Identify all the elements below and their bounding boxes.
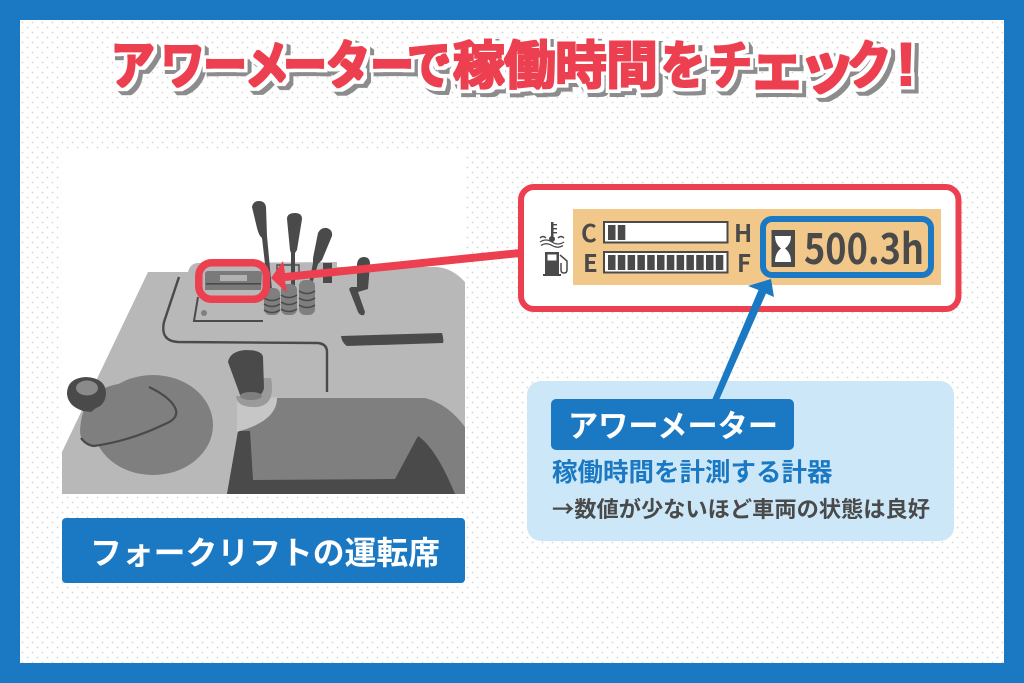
- collar and stick: [237, 397, 277, 432]
- blue arrow: [712, 279, 774, 400]
- note: →数値が少ないほど車両の状態は良好: [552, 492, 930, 524]
- gauge letters: C: [581, 214, 597, 249]
- red highlight box on console: [199, 263, 266, 299]
- title: をチ: [661, 24, 752, 99]
- caption: forklift driver's seat: フォークリフトの運転席: [90, 528, 440, 574]
- title: !: [896, 31, 916, 98]
- title: 稼働時間: [453, 24, 658, 99]
- bellows: [264, 280, 315, 315]
- title: ク: [847, 24, 891, 99]
- icon: coolant temperature: [540, 222, 564, 247]
- title: [110, 20, 916, 105]
- title: ッ: [798, 21, 856, 105]
- console lines: [163, 277, 327, 392]
- gauge panel: [573, 209, 941, 285]
- levers: [252, 201, 370, 315]
- caption: forklift driver's seat: [62, 518, 465, 583]
- icon: fuel pump: [543, 252, 567, 276]
- gauge letters: [581, 214, 752, 279]
- knob: [67, 377, 106, 412]
- gauge letters: F: [737, 244, 751, 279]
- lower panel: [227, 398, 465, 494]
- hour meter on console: [205, 271, 262, 290]
- gauge letters: E: [583, 244, 598, 279]
- red arrow: [271, 249, 520, 293]
- icon: hourglass: [772, 230, 795, 267]
- description: 稼働時間を計測する計器: [552, 452, 833, 489]
- title: アワーメーターで: [111, 24, 451, 99]
- temperature bar: [604, 222, 728, 242]
- title: ェ: [748, 20, 806, 104]
- label: hour meter: アワーメーター: [568, 401, 778, 446]
- hour reading: 500.3h: [804, 216, 924, 277]
- fuel bar: [604, 252, 728, 272]
- console base: [62, 262, 465, 494]
- explanation panel: [527, 381, 954, 541]
- steering wheel cover: [93, 375, 213, 475]
- blue hour meter box: [763, 219, 931, 275]
- gauge letters: H: [734, 214, 752, 249]
- gauge callout: [521, 187, 958, 309]
- illustration: forklift driver's seat: [62, 150, 465, 495]
